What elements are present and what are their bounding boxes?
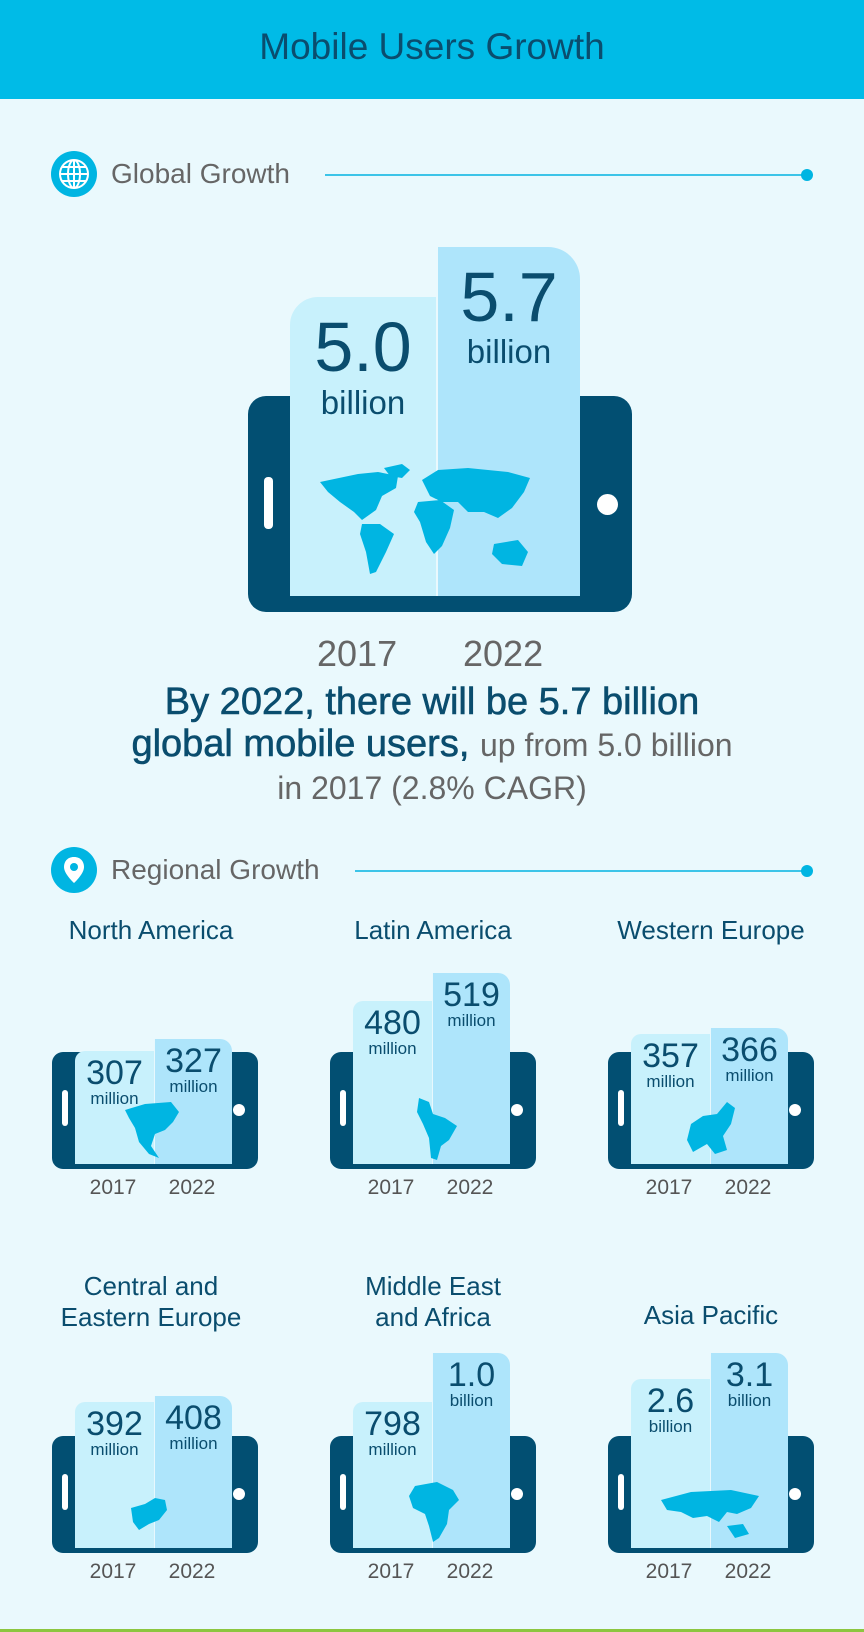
card: Middle East and Africa: million [368, 1440, 417, 1459]
text: 480 [364, 1004, 421, 1042]
card: North America [52, 1039, 258, 1199]
card: Western Europe: million [725, 1066, 774, 1085]
text: 2022 [725, 1560, 771, 1583]
big phone chart [248, 247, 632, 612]
card: Latin America [330, 973, 536, 1199]
world map [320, 464, 530, 574]
text: 2017 [368, 1560, 414, 1583]
year labels: 2017 [317, 633, 397, 674]
title: Mobile Users Growth [259, 26, 605, 67]
text: 408 [165, 1399, 222, 1437]
text: billion [649, 1417, 692, 1436]
label: Global Growth [111, 158, 290, 189]
card: Asia Pacific [608, 1353, 814, 1583]
bar 2022: 5.7 [460, 258, 558, 336]
card: Central and Eastern Europe [52, 1396, 258, 1583]
text: 2022 [725, 1176, 771, 1199]
header bar [0, 0, 864, 99]
bar 2017 [290, 297, 436, 596]
card: Western Europe [608, 1028, 814, 1199]
section heading: global growth [51, 151, 813, 197]
text: 1.0 [448, 1356, 495, 1394]
text: 2017 [646, 1176, 692, 1199]
card: Middle East and Africa [330, 1353, 536, 1583]
section heading: regional growth [51, 847, 813, 893]
text: 798 [364, 1405, 421, 1443]
text: 2.6 [647, 1382, 694, 1420]
statement [131, 681, 733, 806]
text: 2022 [447, 1560, 493, 1583]
bar 2017: billion [321, 384, 405, 421]
card: North America: million [169, 1077, 218, 1096]
card: Central and Eastern Europe: million [169, 1434, 218, 1453]
bar 2022 [436, 247, 580, 596]
text: 519 [443, 976, 500, 1014]
bar 2022: billion [467, 333, 551, 370]
text: 2017 [90, 1560, 136, 1583]
text: 3.1 [726, 1356, 773, 1394]
text: 2022 [169, 1560, 215, 1583]
label: Regional Growth [111, 854, 320, 885]
text: 392 [86, 1405, 143, 1443]
statement: By 2022, there will be 5.7 billion [165, 681, 699, 723]
text: 2022 [169, 1176, 215, 1199]
statement: in 2017 (2.8% CAGR) [277, 770, 587, 806]
card: North America: million [90, 1089, 139, 1108]
text: Middle East [365, 1271, 501, 1301]
text: Western Europe [617, 915, 805, 945]
bar 2017: 5.0 [314, 308, 412, 386]
card: North America: 307 [86, 1054, 143, 1092]
year labels [317, 633, 543, 674]
card: Central and Eastern Europe: million [90, 1440, 139, 1459]
card: Western Europe: 357 [642, 1037, 699, 1075]
card: Western Europe: million [646, 1072, 695, 1091]
text: billion [728, 1391, 771, 1410]
region titles row 2: Eastern Europe [61, 1302, 241, 1332]
icon: globe [51, 151, 97, 197]
statement: global mobile users, up from 5.0 billion [131, 723, 733, 765]
text: billion [450, 1391, 493, 1410]
text: million [447, 1011, 496, 1030]
text: 366 [721, 1031, 778, 1069]
region titles row 2 [61, 1271, 241, 1332]
text: and Africa [375, 1302, 491, 1332]
text: Asia Pacific [644, 1300, 778, 1330]
region titles row 1: North America [69, 915, 233, 945]
region titles row 2: Central and [84, 1271, 218, 1301]
text: 2022 [447, 1176, 493, 1199]
text: Latin America [354, 915, 512, 945]
text: 2017 [90, 1176, 136, 1199]
card: North America: 327 [165, 1042, 222, 1080]
year labels: 2022 [463, 633, 543, 674]
text: million [368, 1039, 417, 1058]
icon: location pin [51, 847, 97, 893]
text: 2017 [368, 1176, 414, 1199]
text: 2017 [646, 1560, 692, 1583]
